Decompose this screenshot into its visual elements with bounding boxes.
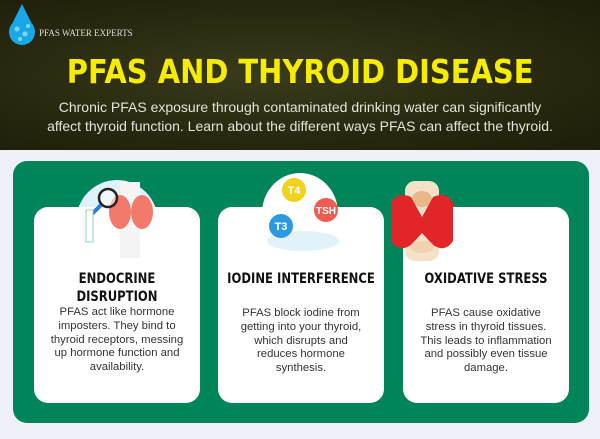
subtitle: [47, 99, 553, 134]
heading: [76, 271, 158, 305]
text: thyroid receptors, messing: [51, 334, 183, 346]
text: imposters. They bind to: [58, 320, 176, 332]
icon: hormone bubbles: T4: [288, 185, 301, 197]
logo: PFAS WATER EXPERTS: [39, 28, 133, 38]
title: PFAS AND THYROID DISEASE: [67, 52, 533, 91]
icon: hormone bubbles: TSH: [316, 206, 336, 217]
text: synthesis.: [276, 362, 326, 374]
text: availability.: [90, 361, 144, 373]
panel: green background: [13, 161, 589, 423]
card 2 circle: [262, 173, 338, 253]
text: up hormone function and: [54, 347, 179, 359]
card: oxidative stress: [403, 207, 569, 403]
heading: DISRUPTION: [76, 289, 158, 305]
subtitle: affect thyroid function. Learn about the different ways PFAS can affect the thyroid.: [47, 118, 553, 134]
text: PFAS block iodine from: [242, 307, 360, 319]
subtitle: Chronic PFAS exposure through contaminated drinking water can significantly: [59, 99, 541, 115]
text: reduces hormone: [257, 348, 345, 360]
heading: ENDOCRINE: [79, 271, 155, 287]
text: [50, 306, 183, 373]
text: stress in thyroid tissues.: [426, 321, 546, 333]
card: iodine interference: [218, 207, 384, 403]
text: PFAS cause oxidative: [431, 307, 541, 319]
text: damage.: [464, 362, 508, 374]
icon: thyroid magnifier: [86, 182, 153, 258]
card: endocrine disruption: [34, 207, 200, 403]
icon: hormone bubbles: T3: [275, 221, 287, 233]
header background: [0, 0, 600, 150]
text: PFAS act like hormone: [60, 306, 174, 318]
icon: hormone bubbles: [267, 178, 339, 251]
text: getting into your thyroid,: [241, 321, 361, 333]
card 1 circle: [76, 180, 158, 264]
text: This leads to inflammation: [420, 335, 552, 347]
logo: [9, 4, 133, 45]
text: and possibly even tissue: [424, 348, 548, 360]
text: which disrupts and: [254, 335, 348, 347]
heading: OXIDATIVE STRESS: [424, 271, 548, 287]
heading: IODINE INTERFERENCE: [227, 271, 375, 287]
icon: inflamed thyroid: [391, 181, 453, 261]
text: [420, 307, 552, 374]
text: [241, 307, 361, 374]
